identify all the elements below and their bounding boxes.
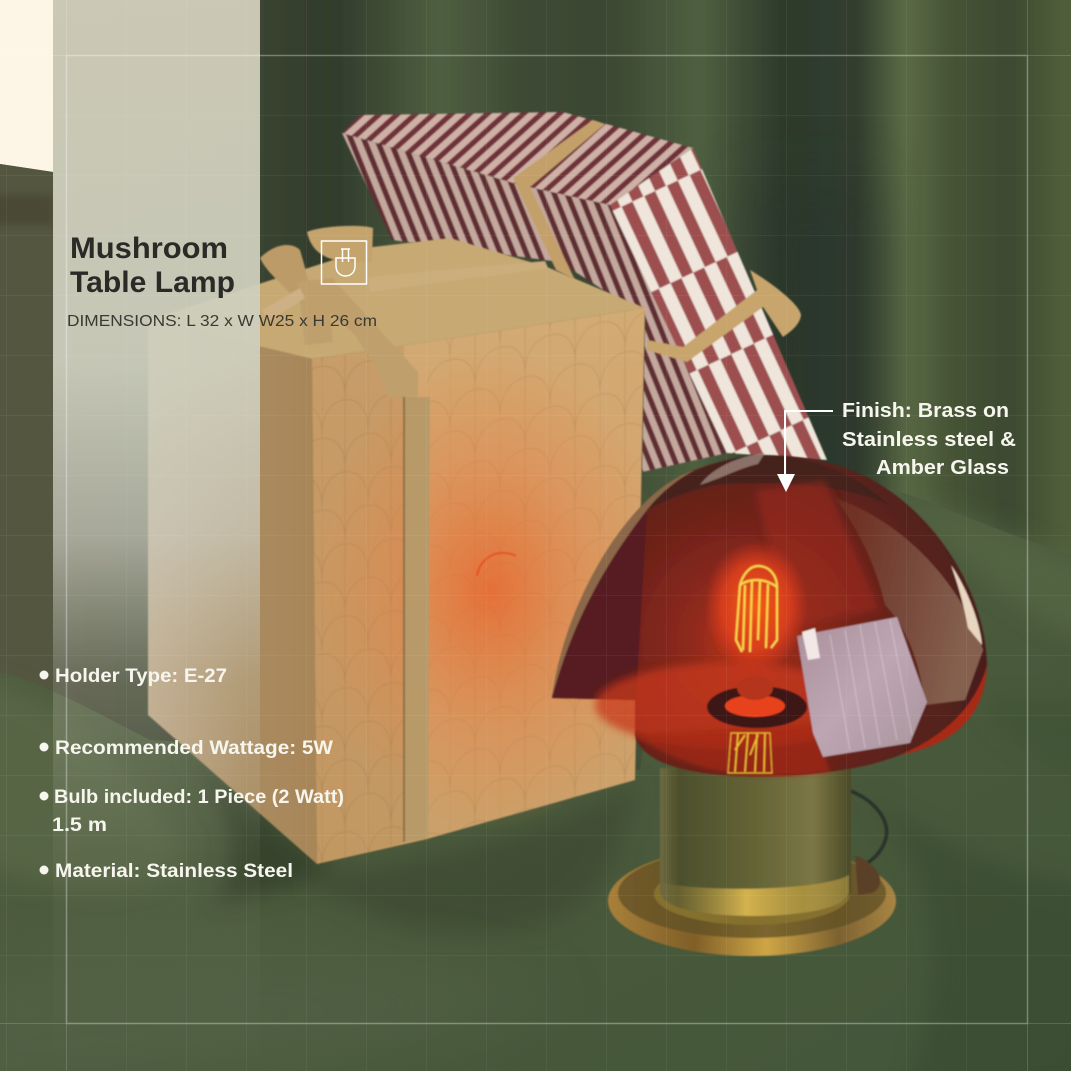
filament reflection (728, 733, 772, 773)
title: Mushroom (70, 232, 228, 265)
photo background: green velvet curtain (0, 0, 1071, 770)
callout text: Stainless steel & (842, 429, 1016, 451)
vertical ribbon (404, 397, 430, 842)
right side brown highlight (835, 498, 983, 705)
window reflection (797, 617, 927, 757)
dome left flap (552, 510, 647, 700)
brass stem (660, 768, 851, 916)
callout: finish (777, 400, 1016, 492)
brass base plate (608, 846, 896, 956)
spec: bulb: Bulb included: 1 Piece (2 Watt) (54, 787, 344, 808)
spec: holder type: Holder Type: E-27 (55, 666, 227, 687)
callout text (842, 400, 1016, 479)
filament bulb (736, 566, 777, 652)
icon: lamp in square (322, 241, 366, 284)
title: Table Lamp (70, 266, 235, 299)
bulb halo (706, 542, 806, 666)
patterned end panel (610, 148, 827, 460)
spec list (40, 666, 344, 882)
striped box side face (342, 133, 727, 472)
spec: cable length: 1.5 m (52, 815, 107, 836)
top rim reflection (647, 455, 890, 510)
box top face (148, 238, 645, 359)
box left face (148, 320, 317, 864)
ribbon bow (260, 226, 548, 398)
box front face (312, 308, 645, 864)
green velvet cloth (0, 480, 1080, 1080)
callout text: Finish: Brass on (842, 400, 1009, 422)
frosted translucent panel (53, 0, 260, 852)
spec: wattage: Recommended Wattage: 5W (55, 738, 333, 759)
callout text: Amber Glass (876, 457, 1009, 479)
opening ring (707, 686, 807, 728)
striped reflection at top (755, 480, 880, 625)
title (70, 232, 235, 299)
kraft gift box (148, 226, 665, 864)
striped box top face (342, 112, 693, 205)
orange lamp glow on box (358, 396, 642, 778)
tan strap over striped box (513, 120, 605, 280)
dimensions text: DIMENSIONS: L 32 x W W25 x H 26 cm (67, 313, 377, 330)
window and wall at far left (0, 0, 53, 700)
mushroom lamp (552, 453, 987, 956)
amber glass dome (552, 453, 987, 777)
arrow (777, 411, 833, 492)
power cable (848, 790, 887, 872)
tan strap across patterned panel with loop (647, 270, 801, 362)
red floor band reflection (589, 660, 814, 747)
spec: material: Material: Stainless Steel (55, 861, 293, 882)
striped gift box leaning behind (342, 112, 827, 472)
